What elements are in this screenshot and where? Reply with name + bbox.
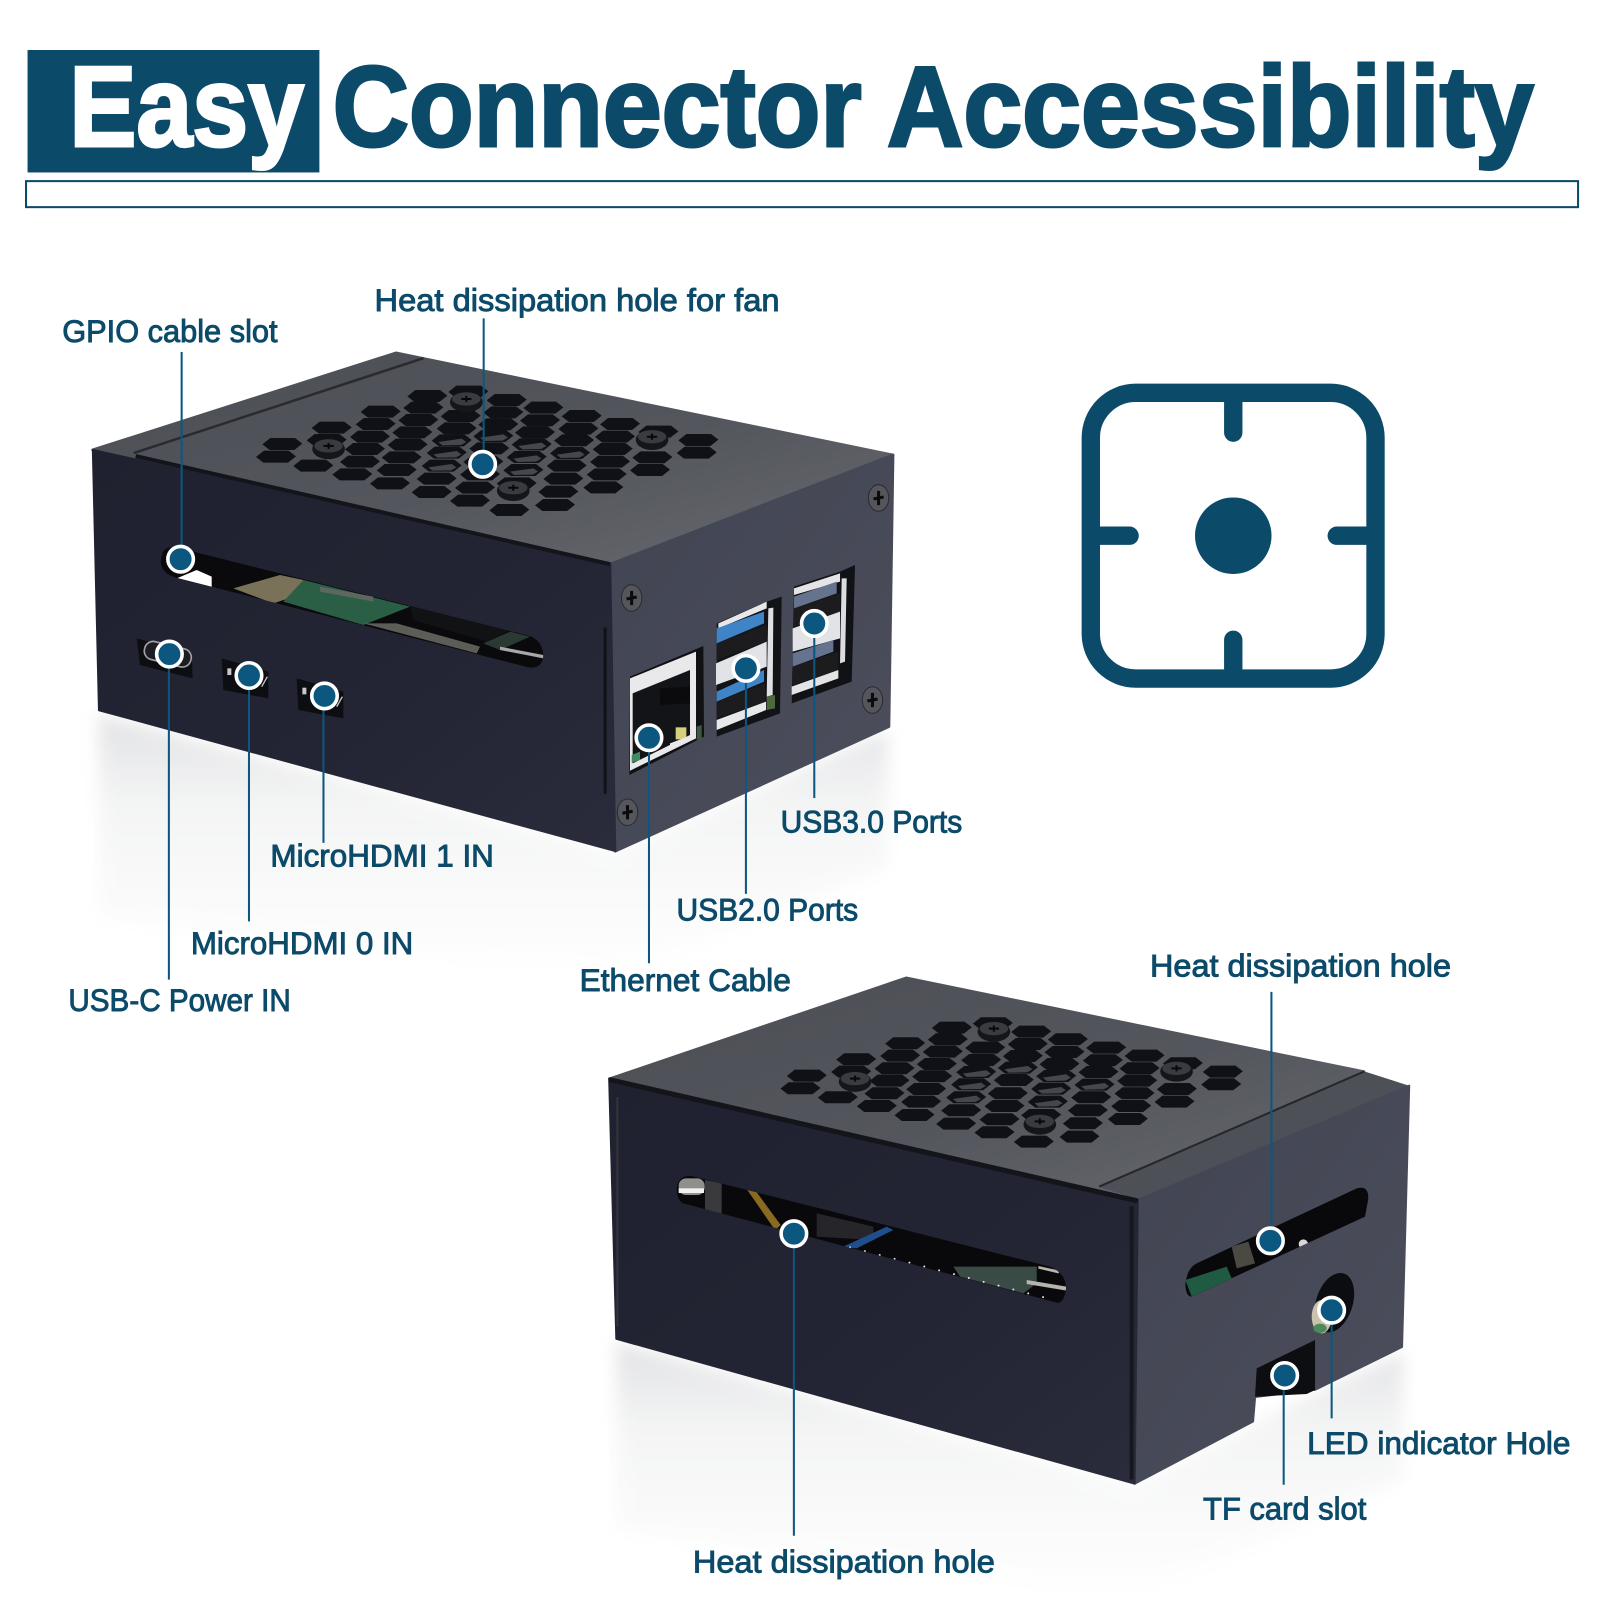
case front with slot bbox=[609, 1079, 1138, 1484]
TF card slot bbox=[1255, 1340, 1315, 1397]
callout: MicroHDMI 0 IN: MicroHDMI 0 IN bbox=[191, 925, 413, 961]
HDMI 1 slot bbox=[297, 678, 343, 718]
product photo: case, rear and sd side bbox=[609, 978, 1409, 1600]
icon: target locator bbox=[1091, 393, 1376, 679]
callout: heat dissipation hole for fan bbox=[374, 282, 780, 477]
callout: Ethernet Cable bbox=[580, 725, 791, 998]
callout: USB3.0 Ports bbox=[781, 611, 962, 840]
USB-C slot bbox=[137, 638, 193, 678]
callout: USB-C Power IN bbox=[68, 641, 291, 1018]
case side with ports bbox=[610, 455, 893, 851]
USB 2.0 ports bbox=[716, 597, 782, 737]
case top with fan vent bbox=[609, 978, 1364, 1202]
callout: GPIO cable slot: GPIO cable slot bbox=[62, 313, 278, 349]
callout: heat dissipation hole, rear bbox=[693, 1221, 995, 1579]
callout: LED indicator Hole: LED indicator Hole bbox=[1307, 1425, 1570, 1461]
callout: USB2.0 Ports bbox=[677, 656, 858, 927]
callout: GPIO cable slot bbox=[62, 313, 278, 572]
side vent slot bbox=[1186, 1188, 1368, 1296]
ethernet port bbox=[629, 646, 704, 775]
case side with vents bbox=[1099, 1071, 1409, 1484]
LED hole bbox=[1307, 1268, 1361, 1338]
callout: USB3.0 Ports: USB3.0 Ports bbox=[781, 804, 962, 840]
callout: USB2.0 Ports: USB2.0 Ports bbox=[677, 891, 858, 927]
callout: LED indicator Hole bbox=[1307, 1297, 1570, 1461]
callout: heat dissipation hole, side bbox=[1150, 948, 1451, 1254]
callout: heat dissipation hole, rear: Heat dissipation hole bbox=[693, 1543, 995, 1579]
callout: Ethernet Cable: Ethernet Cable bbox=[580, 962, 791, 998]
case front with slot and ports bbox=[93, 450, 615, 851]
callout: MicroHDMI 1 IN bbox=[270, 683, 494, 873]
product photo: case, front and ports side bbox=[93, 353, 893, 980]
rear slot bbox=[673, 1173, 1073, 1307]
title bbox=[28, 44, 1534, 172]
callout: heat dissipation hole, side: Heat dissipation hole bbox=[1150, 948, 1451, 984]
title text: Connector Accessibility: Connector Accessibility bbox=[333, 44, 1534, 171]
GPIO slot bbox=[160, 547, 544, 668]
callout: TF card slot: TF card slot bbox=[1203, 1490, 1367, 1526]
title underline box bbox=[26, 181, 1578, 207]
title badge: Easy: Easy bbox=[69, 44, 304, 171]
case top with fan vent bbox=[93, 353, 893, 564]
USB 3.0 ports bbox=[792, 565, 855, 703]
callout: USB-C Power IN: USB-C Power IN bbox=[68, 982, 291, 1018]
callout: MicroHDMI 1 IN: MicroHDMI 1 IN bbox=[270, 837, 494, 873]
callout: TF card slot bbox=[1203, 1363, 1367, 1526]
HDMI 0 slot bbox=[222, 658, 268, 698]
callout: heat dissipation hole for fan: Heat dissipation hole for fan bbox=[374, 282, 780, 318]
callout: MicroHDMI 0 IN bbox=[191, 663, 413, 961]
